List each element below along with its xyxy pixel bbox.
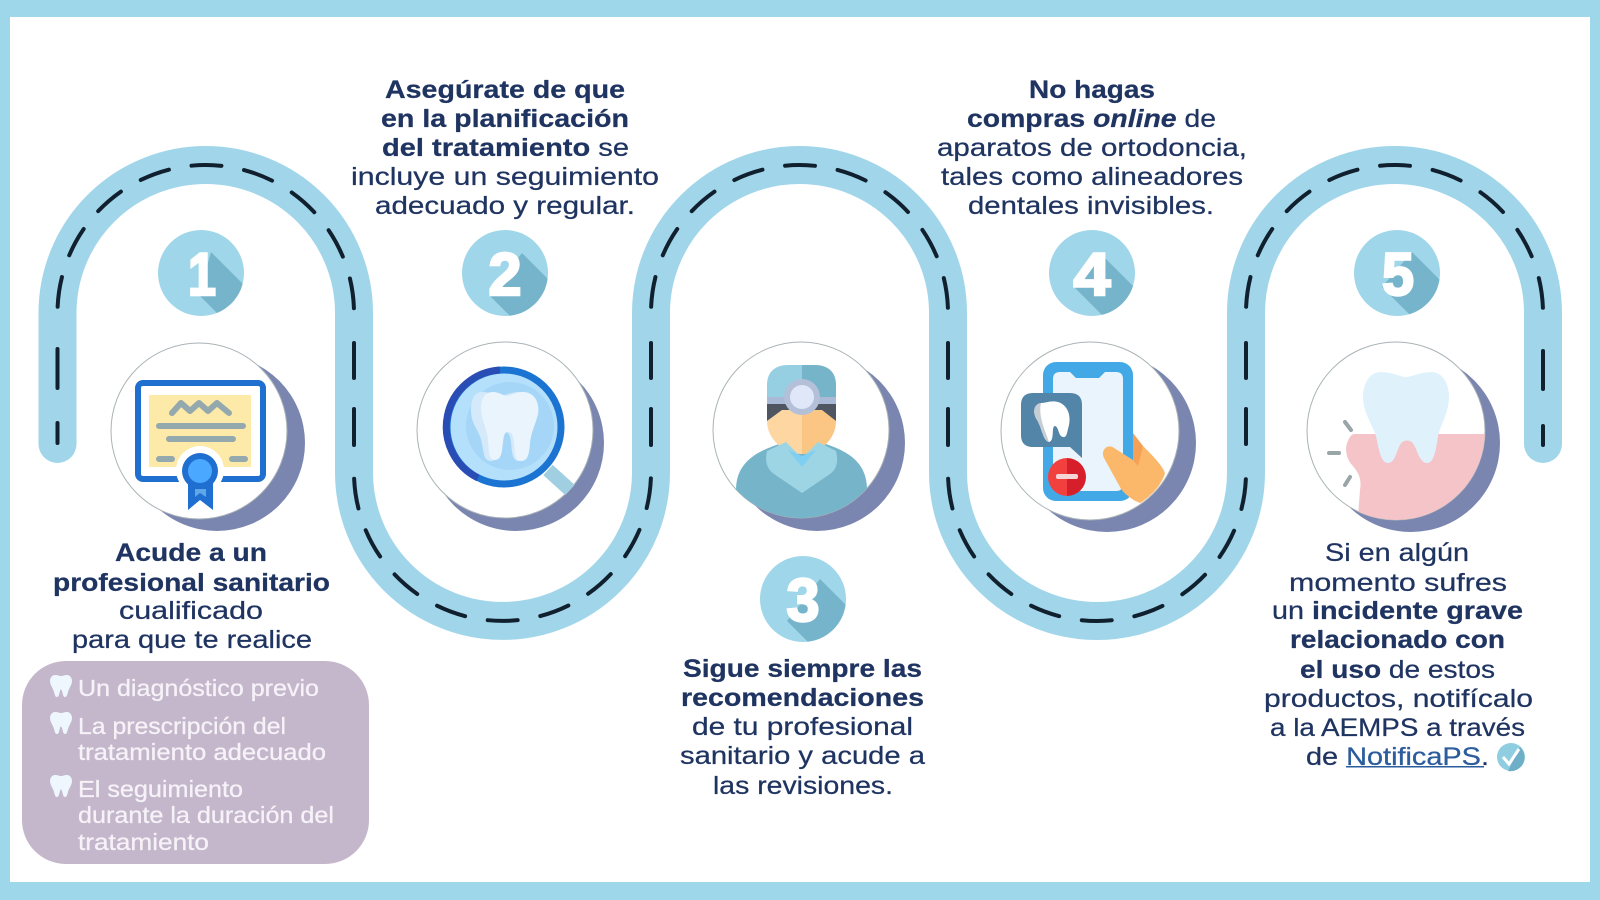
badge 3 (760, 556, 846, 642)
text: step 2: en la planificación (381, 105, 629, 133)
badge 1: 1 (188, 241, 216, 308)
icon: dentist (713, 342, 905, 531)
badge 3: 3 (786, 567, 820, 634)
text: step 2: incluye un seguimiento (351, 163, 659, 191)
text: step 3: Sigue siempre las (683, 655, 922, 683)
text: step 4: compras online de (967, 105, 1216, 133)
text: step 3: sanitario y acude a (680, 742, 925, 770)
text: step 1: Acude a un (115, 539, 267, 567)
icon: check mark (1497, 743, 1525, 771)
text: step 4: dentales invisibles. (968, 192, 1214, 220)
text: step 4 (937, 76, 1247, 220)
text: step 1: cualificado (119, 597, 263, 625)
text: step 5: de NotificaPS . (1306, 743, 1489, 771)
badge 1 (158, 230, 244, 316)
list item 3: El seguimiento (78, 776, 243, 802)
text: step 2: Asegúrate de que (385, 76, 625, 104)
text: step 5: Si en algún (1325, 539, 1469, 567)
icon: tooth bullet 1 (50, 675, 72, 697)
icon: tooth bullet 2 (50, 712, 72, 734)
list item 3 (78, 776, 334, 855)
icon: phone with tooth (1001, 342, 1196, 532)
text: step 4: tales como alineadores (941, 163, 1243, 191)
badge 5: 5 (1382, 241, 1414, 308)
text: step 5: productos, notifícalo (1264, 685, 1533, 713)
list item 3: durante la duración del (78, 802, 334, 828)
text: step 2: del tratamiento se (382, 134, 629, 162)
list item 2: tratamiento adecuado (78, 739, 326, 765)
icon: certificate (111, 343, 305, 531)
text: step 3 (680, 655, 925, 800)
text: step 5: momento sufres (1289, 569, 1507, 597)
text: step 5: relacionado con (1290, 626, 1505, 654)
text: step 1: profesional sanitario (53, 569, 330, 597)
list item 3: tratamiento (78, 829, 209, 855)
text: step 4: aparatos de ortodoncia, (937, 134, 1247, 162)
text: step 2 (351, 76, 659, 220)
list item 2: La prescripción del (78, 713, 286, 739)
text: step 3: de tu profesional (692, 713, 913, 741)
text: step 2: adecuado y regular. (375, 192, 635, 220)
text: step 3: las revisiones. (713, 772, 893, 800)
text: step 5: a la AEMPS a través (1270, 714, 1525, 742)
icon: magnified tooth (417, 342, 604, 531)
text: step 5 (1264, 539, 1533, 771)
list item 2 (78, 713, 326, 765)
icon: tooth bullet 3 (50, 775, 72, 797)
text: step 5: un incidente grave (1272, 597, 1523, 625)
badge 4 (1049, 230, 1135, 316)
text: step 1: para que te realice (72, 626, 312, 654)
text: step 4: No hagas (1029, 76, 1155, 104)
text: step 3: recomendaciones (681, 684, 924, 712)
list item 1: Un diagnóstico previo (78, 675, 319, 701)
winding road (58, 165, 1543, 621)
badge 2: 2 (488, 241, 522, 308)
text: step 1 (53, 539, 330, 654)
icon: tooth with gum (1307, 342, 1500, 532)
panel: checklist (22, 661, 369, 864)
badge 2 (462, 230, 548, 316)
badge 4: 4 (1074, 241, 1111, 308)
text: step 5: el uso de estos (1300, 656, 1495, 684)
badge 5 (1354, 230, 1440, 316)
